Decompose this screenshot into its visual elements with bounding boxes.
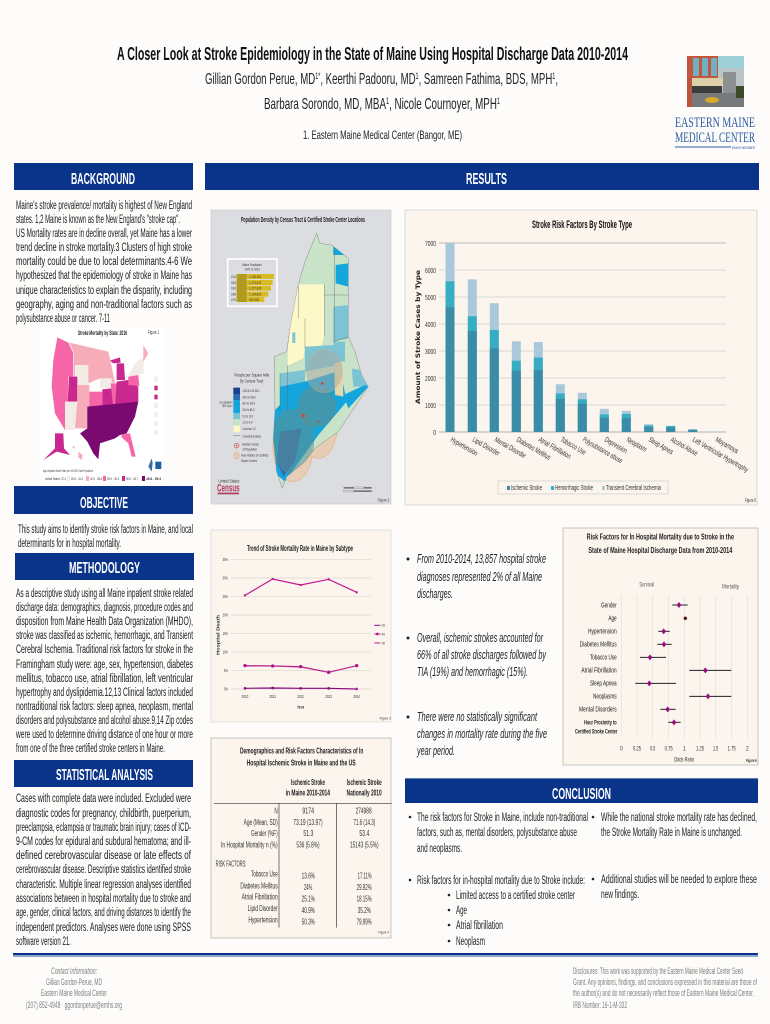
row labels: Gender (%F): [251, 829, 278, 838]
x axis labels: Tobacco Use: [559, 435, 588, 457]
legend: people per square mile: of Population: [242, 446, 257, 451]
legend: Hemorrhagic Stroke: [555, 483, 593, 492]
text block: methodology: Framingham study were: age, sex, hypertension, diabetes: [16, 659, 193, 671]
legend: people per square mile: 5.0 to 19.9: [242, 413, 253, 418]
x axis labels: 0.75: [665, 746, 673, 753]
row labels: Age (Mean, SD): [244, 818, 278, 827]
text block: background: hypothesized that the epidemiology of stroke in Maine has: [16, 270, 192, 282]
row labels: Hour Proximity to: [584, 720, 617, 726]
text block: statistical analysis: Cases with complete data were included. Excluded were: [16, 793, 191, 805]
text block: background: geography, aging and non-traditional factors such as: [16, 299, 192, 311]
heading: background: [14, 163, 193, 190]
heading: statistical analysis: STATISTICAL ANALYSIS: [56, 767, 153, 784]
text block: methodology: Cerebral Ischemia. Traditional risk factors for stroke in the: [16, 644, 193, 656]
text block: objective: This study aims to identify stroke risk factors in Maine, and local: [18, 524, 193, 536]
x axis labels: 2011: [269, 694, 276, 699]
panel: figure 6 forest plot of in-hospital mortality: Mortality: [722, 584, 739, 591]
panel: figure 1 US stroke mortality map: Figure 1: [148, 330, 159, 336]
text block: methodology: nontraditional risk factors: sleep apnea, neoplasm, mental: [16, 701, 193, 713]
text block: statistical analysis: cerebrovascular disease. Descriptive statistics identified stroke: [16, 864, 191, 876]
x axis labels: [449, 435, 750, 474]
row labels: [216, 807, 278, 925]
bullet: mortality rate change: changes in mortality rate during the five: [417, 727, 547, 741]
column headers: in Maine 2010-2014: [286, 787, 330, 797]
inset: Maine population chart: 1970 to 2010: [244, 268, 260, 272]
text block: methodology: mellitus, tobacco use, atrial fibrillation, left ventricular: [16, 673, 193, 685]
text block: statistical analysis: preeclampsia, eclampsia or traumatic brain injury; cases of ICD-: [16, 822, 191, 834]
row labels: Hypertension: [588, 627, 617, 636]
text block: background: mortality could be due to local determinants.4-6 We: [16, 256, 192, 268]
national column: 79.99%: [357, 917, 372, 926]
series markers: [243, 578, 358, 690]
legend: mortality rate classes: United States: 37.3: [45, 476, 66, 481]
inset: Maine population chart: 1,124,660: [249, 293, 261, 297]
legend: people per square mile: 20.0 to 88.3: [242, 407, 255, 412]
legend: CH: [381, 623, 385, 628]
heading: results: RESULTS: [466, 171, 507, 188]
y axis labels: [223, 557, 228, 692]
legend: people per square mile: [219, 373, 270, 463]
confidence intervals: [635, 605, 731, 722]
text block: statistical analysis: defined cerebrovascular disease or late effects of: [16, 850, 192, 862]
logo: Eastern Maine Medical Center: EMHS MEMBER: [732, 145, 755, 150]
logo: United States Census Bureau: [217, 478, 240, 495]
odds ratio markers: [647, 602, 710, 725]
inset: Maine population chart: 992,048: [249, 298, 259, 302]
inset: Maine population chart: [228, 259, 277, 306]
text block: conclusion right column: new findings.: [601, 889, 639, 901]
legend: [374, 623, 385, 645]
Maine column: 40.9%: [302, 906, 315, 915]
icon: hospital photo: [687, 56, 744, 107]
x axis labels: 2014: [353, 694, 360, 699]
authors: [205, 71, 558, 113]
text block: conclusion left column: The risk factors for Stroke in Maine, include non-traditional: [417, 812, 588, 824]
text block: disclosures: [573, 966, 757, 1010]
x axis labels: 2012: [297, 694, 304, 699]
legend: mortality rate classes: 32.5 - 35.8: [90, 476, 102, 481]
row labels: Gender: [601, 600, 617, 609]
text block: methodology: disorders and polysubstance and alcohol abuse.9,14 Zip codes: [16, 715, 193, 727]
legend: people per square mile: Less than 1.0: [242, 426, 256, 431]
text block: conclusion left column: Age: [456, 905, 467, 917]
legend: AS: [381, 631, 385, 636]
text block: methodology: discharge data: demographics, diagnosis, procedure codes and: [16, 602, 193, 614]
y axis labels: 1000: [425, 401, 436, 410]
y axis labels: 15%: [223, 631, 228, 636]
authors: , Nicole Cournoyer, MPH: [389, 96, 497, 113]
y axis labels: 5000: [425, 293, 436, 302]
bullet: mortality rate change: There were no statistically significant: [417, 710, 537, 724]
national column: 17.11%: [358, 872, 372, 881]
y axis labels: 0%: [224, 687, 228, 692]
text block: methodology: from one of the three certified stroke centers in Maine.: [16, 743, 165, 755]
inset: Maine population chart: 2010: [231, 275, 236, 279]
panel: figure 4 demographics table: Figure 4: [378, 930, 390, 935]
legend: people per square mile: 200.0 to 999.9: [242, 394, 256, 399]
panel: figure 2 population density map of Maine: Population Density by Census Tract & Certified Stroke Center Locations: [241, 217, 365, 224]
x axis labels: Lipid Disorder: [471, 435, 502, 458]
x axis labels: Atrial Fibrillation: [537, 435, 573, 461]
legend: [498, 481, 668, 494]
text block: conclusion left column: and neoplasms.: [417, 843, 462, 855]
grid lines: [231, 559, 371, 689]
authors: ,: [555, 71, 558, 88]
legend: Ischemic Stroke: [511, 483, 542, 492]
panel: figure 1 US stroke mortality map: Stroke Mortality by State: 2016: [78, 331, 127, 337]
authors: 1: [416, 71, 419, 81]
authors: 1*: [315, 71, 321, 81]
authors: 1: [386, 96, 389, 106]
inset: Maine population chart: 1990: [231, 287, 236, 291]
text block: statistical analysis: [16, 793, 192, 948]
panel: figure 6 forest plot of in-hospital mortality: Survival: [639, 581, 654, 588]
x axis labels: Polysubstance abuse: [581, 435, 624, 465]
heading: results: [205, 163, 759, 190]
logo: United States Census Bureau: United States: [218, 478, 239, 483]
text block: statistical analysis: characteristic. Multiple linear regression analyses identified: [16, 879, 191, 891]
panel: figure 6 forest plot of in-hospital mortality: [563, 528, 758, 765]
text block: conclusion left column: factors, such as, mental disorders, polysubstance abuse: [417, 827, 577, 839]
map: Maine census tracts: [273, 233, 368, 488]
panel: figure 3 mortality trend line chart: Figure 3: [380, 716, 391, 721]
map: drive-time circles over the sea: [273, 388, 338, 482]
legend: people per square mile: People per Square Mile: [234, 373, 270, 378]
row labels: Mental Disorders: [579, 705, 617, 714]
x axis labels: Neoplasm: [625, 435, 649, 454]
x axis labels: 2010: [242, 694, 249, 699]
bullet: stroke subtype share: TIA (19%) and hemorrhagic (15%).: [417, 665, 528, 679]
panel: figure 6 forest plot of in-hospital mortality: Odds Ratio: [674, 757, 694, 764]
Maine column: 536 (5.8%): [296, 841, 320, 850]
text block: statistical analysis: independent predictors. Analyses were done using SPSS: [16, 922, 191, 934]
y axis labels: 3000: [425, 347, 436, 356]
legend: people per square mile: 1.0 to 4.9: [242, 420, 253, 425]
heading: background: BACKGROUND: [71, 171, 135, 188]
legend: mortality rate classes: 45.8 - 55.4: [146, 476, 162, 481]
x axis labels: [242, 694, 360, 709]
y axis labels: 0: [433, 428, 436, 437]
text block: conclusion left column: Atrial fibrillation: [456, 920, 503, 932]
legend: people per square mile: 1,000.0 to 21,353.1: [242, 388, 260, 393]
y axis labels: 10%: [223, 650, 228, 655]
panel: figure 3 mortality trend line chart: [211, 530, 391, 722]
row labels: Sleep Apnea: [590, 679, 617, 688]
bullet: hospital stroke diagnoses: [406, 552, 546, 601]
inset: Maine population chart: 1980: [231, 293, 236, 297]
y axis labels: 5%: [224, 668, 228, 673]
logo: United States Census Bureau: Census: [217, 483, 240, 495]
table title: Demographics and Risk Factors Characteristics of In: [240, 745, 363, 755]
heading: conclusion: CONCLUSION: [552, 786, 611, 803]
inset: Maine population chart: 2000: [231, 281, 236, 285]
legend: people per square mile: Hour Radius of Certified: [241, 452, 268, 457]
text block: conclusion right column: [592, 812, 757, 901]
x axis labels: 1.5: [713, 746, 718, 753]
legend: TIA: [381, 640, 385, 645]
x axis labels: Diabetes Mellitus: [515, 435, 553, 462]
row labels: N: [274, 807, 278, 816]
x axis labels: 0: [620, 746, 623, 753]
legend: people per square mile: County Boundary: [242, 433, 261, 438]
authors: Barbara Sorondo, MD, MBA: [264, 96, 463, 113]
heading: conclusion: [405, 779, 758, 803]
y axis labels: 25%: [223, 594, 228, 599]
authors: 1: [552, 71, 555, 81]
x axis labels: 0.25: [633, 746, 641, 753]
legend: people per square mile: By Census Tract: [240, 378, 264, 383]
column headers: [286, 777, 382, 797]
x axis labels: [620, 746, 749, 753]
affiliation: 1. Eastern Maine Medical Center (Bangor, ME): [303, 128, 462, 142]
legend: mortality rate classes: 35.9 - 39.4: [107, 476, 119, 481]
row labels: Neoplasms: [593, 692, 617, 701]
national column: 274988: [356, 807, 372, 816]
heading: methodology: [15, 553, 194, 580]
x axis labels: Alcohol Abuse: [669, 435, 699, 458]
authors: , Keerthi Padooru, MD: [320, 71, 416, 88]
text block: background: [16, 200, 192, 325]
legend: mortality rate classes: [45, 476, 162, 481]
x axis labels: Sleep Apnea: [647, 435, 675, 456]
column headers: Ischemic Stroke: [291, 777, 325, 787]
text block: objective: determinants for in hospital mortality.: [18, 538, 121, 550]
row labels: Lipid Disorder: [248, 904, 278, 913]
Maine column: 50.3%: [302, 917, 315, 926]
y axis labels: 30%: [223, 576, 228, 581]
legend: people per square mile: Stroke Centers: [241, 458, 257, 463]
inset: Maine population chart: 1,227,928: [249, 287, 261, 291]
row labels: [575, 600, 618, 736]
text block: background: states. 1,2 Maine is known as the New England's "stroke cap".: [16, 214, 180, 226]
inset: Maine population chart: Maine Population: [242, 263, 262, 267]
text block: contact information: (207) 852-4948 ggordonperue@emhs.org: [26, 1000, 122, 1010]
y axis labels: 6000: [425, 266, 436, 275]
x axis labels: 1.25: [696, 746, 704, 753]
panel: figure 5 stroke risk factors bar chart: [405, 210, 757, 505]
panel: figure 3 mortality trend line chart: Hospital Death: [216, 615, 221, 655]
legend: mortality rate classes: 25.5 - 31.3: [71, 476, 83, 481]
stacked bars: [446, 243, 720, 432]
row labels: Tobacco Use: [251, 870, 278, 879]
panel: figure 2 population density map of Maine: Figure 2: [378, 498, 390, 503]
map of US states: [43, 337, 161, 472]
text block: methodology: were used to determine driving distance of one hour or more: [15, 729, 193, 741]
row labels: Age: [608, 614, 617, 623]
heading: objective: [14, 486, 193, 514]
text block: disclosures: IRB Number: 16-1-M-332: [573, 1000, 627, 1010]
x axis labels: Mental Disorder: [493, 435, 528, 460]
row labels: Atrial Fibrillation: [242, 893, 278, 902]
bullet: stroke subtype share: Overall, ischemic strokes accounted for: [417, 631, 543, 645]
panel: figure 2 population density map of Maine: [211, 210, 391, 504]
text block: contact information: Contact Information:: [51, 966, 97, 976]
text block: statistical analysis: software version 21.: [16, 936, 71, 948]
text block: background: polysubstance abuse or cancer. 7-11: [16, 313, 110, 325]
text block: conclusion left column: [409, 812, 588, 948]
panel: figure 5 stroke risk factors bar chart: Stroke Risk Factors By Stroke Type: [532, 219, 632, 231]
row labels: In Hospital Mortality n (%): [221, 841, 278, 850]
national column: 18.15%: [357, 895, 372, 904]
panel: figure 6 forest plot of in-hospital mortality: Figure 6: [746, 758, 757, 763]
row labels: Diabetes Mellitus: [580, 640, 617, 649]
x axis labels: 2: [746, 746, 749, 753]
legend: people per square mile: 88.4 to 199.9: [242, 401, 255, 406]
text block: background: trend decline in stroke mortality.3 Clusters of high stroke: [16, 242, 192, 254]
Maine column: 25.1%: [302, 895, 315, 904]
grid lines: [621, 595, 747, 738]
heading: objective: OBJECTIVE: [80, 495, 128, 512]
x axis labels: Hypertension: [449, 435, 479, 458]
x axis labels: 1.75: [728, 746, 736, 753]
y axis labels: [425, 239, 436, 437]
text block: contact information: Gillian Gordon-Perue, MD: [46, 977, 102, 987]
heading: statistical analysis: [14, 760, 193, 787]
bullet: mortality rate change: [406, 710, 547, 758]
bullet: stroke subtype share: [406, 631, 546, 679]
text block: conclusion left column: Limited access to a certified stroke center: [456, 890, 575, 902]
text block: contact information: [26, 966, 122, 1010]
table title: Hospital Ischemic Stroke in Maine and the US: [247, 757, 356, 767]
table title: [240, 745, 363, 767]
panel: figure 4 demographics table: [211, 738, 392, 938]
row labels: Tobacco Use: [590, 653, 617, 662]
x axis labels: Moyamoya: [714, 435, 741, 456]
text block: objective: [18, 524, 193, 550]
logo: Eastern Maine Medical Center: [675, 56, 755, 150]
national column: 35.2%: [358, 906, 371, 915]
text block: methodology: [15, 588, 193, 755]
panel: figure 3 mortality trend line chart: Trend of Stroke Mortality Rate in Maine by Subtype: [247, 544, 353, 553]
Maine column: 9174: [302, 807, 314, 816]
grid lines: [439, 243, 726, 432]
text block: conclusion left column: Risk factors for in-hospital mortality due to Stroke include:: [417, 875, 585, 887]
Maine column: 73.19 (13.97): [293, 818, 323, 827]
row labels: RISK FACTORS:: [216, 859, 246, 868]
series lines: [245, 579, 357, 689]
text block: methodology: hypertrophy and dyslipidemia.12,13 Clinical factors included: [16, 687, 193, 699]
text block: conclusion left column: Neoplasm: [456, 936, 485, 948]
Maine column: 24%: [304, 883, 312, 892]
Maine column: 13.6%: [302, 872, 315, 881]
text block: statistical analysis: age, gender, clinical factors, and driving distances to identify the: [16, 907, 191, 919]
column headers: Ischemic Stroke: [347, 777, 382, 787]
row labels: Hypertension: [248, 916, 278, 925]
legend: Transient Cerebral Ischemia: [606, 483, 661, 492]
text block: results bullets: [406, 552, 547, 758]
bullet: mortality rate change: year period.: [416, 744, 455, 758]
row labels: Certified Stroke Center: [575, 730, 618, 736]
heading: methodology: METHODOLOGY: [69, 560, 140, 577]
national column: 53.4: [359, 829, 370, 838]
national column: [350, 807, 379, 926]
x axis labels: 1: [683, 746, 686, 753]
bullet: hospital stroke diagnoses: From 2010-2014, 13,857 hospital stroke: [417, 552, 546, 566]
text block: background: unique characteristics to explain the disparity, including: [16, 285, 192, 297]
plot title: [587, 532, 734, 555]
authors: , Samreen Fathima, BDS, MPH: [419, 71, 552, 88]
y axis labels: 4000: [425, 320, 436, 329]
panel: figure 1 US stroke mortality map: [40, 328, 163, 484]
y axis title: Amount of Stroke Cases by Type: [414, 269, 422, 404]
panel: figure 5 stroke risk factors bar chart: Figure 5: [745, 498, 756, 504]
inset: Maine population chart: 1,274,923: [249, 281, 261, 285]
legend: people per square mile: U.S. population: [219, 400, 232, 404]
row labels: Atrial Fibrillation: [581, 666, 617, 675]
text block: statistical analysis: 9-CM codes for epidural and subdural hematoma; and ill-: [16, 836, 191, 848]
text block: methodology: disposition from Maine Health Data Organization (MHDO),: [16, 616, 193, 628]
x axis labels: 0.5: [650, 746, 655, 753]
text block: background: US Mortality rates are in decline overall, yet Maine has a lower: [16, 228, 192, 240]
Maine column: 51.3: [303, 829, 314, 838]
bullet: hospital stroke diagnoses: diagnoses represented 2% of all Maine: [417, 570, 542, 584]
y axis labels: 7000: [425, 239, 436, 248]
authors: Gillian Gordon Perue, MD: [205, 71, 388, 88]
inset: Maine population chart: 1,328,361: [249, 275, 261, 279]
legend: people per square mile: Median Center: [242, 442, 259, 447]
text block: statistical analysis: associations between in hospital mortality due to stroke and: [16, 893, 191, 905]
inset: Maine population chart: 1970: [231, 298, 236, 302]
Maine column: [293, 807, 323, 926]
text block: background: Maine's stroke prevalence/ mortality is highest of New England: [16, 200, 192, 212]
bullet: stroke subtype share: 66% of all stroke discharges followed by: [417, 648, 546, 662]
bullet: hospital stroke diagnoses: discharges.: [417, 587, 453, 601]
national column: 71.6 (14.3): [353, 818, 376, 827]
y axis labels: 2000: [425, 374, 436, 383]
national column: 15143 (5.5%): [350, 841, 379, 850]
authors: 1: [497, 96, 500, 106]
x axis labels: 2013: [325, 694, 332, 699]
y axis labels: 20%: [223, 613, 228, 618]
x axis labels: Years: [297, 704, 305, 709]
text block: methodology: stroke was classified as ischemic, hemorrhagic, and Transient: [16, 630, 193, 642]
national column: 29.92%: [357, 883, 372, 892]
scale bar: [344, 487, 372, 492]
x axis labels: Depression: [603, 435, 629, 455]
column headers: Nationally 2010: [347, 787, 382, 797]
row labels: Diabetes Mellitus: [240, 881, 278, 890]
legend: mortality rate classes: 39.5 - 45.7: [126, 476, 138, 481]
text block: contact information: Eastern Maine Medical Center: [41, 988, 107, 998]
text block: statistical analysis: diagnostic codes for pregnancy, childbirth, puerperium,: [16, 808, 191, 820]
y axis labels: 35%: [223, 557, 228, 562]
text block: methodology: As a descriptive study using all Maine inpatient stroke related: [16, 588, 193, 600]
legend: people per square mile: 88.4 /sq mi: [222, 404, 232, 408]
panel: figure 1 US stroke mortality map: Age-Adjusted Death Rate per 100,000 Total Population: [43, 468, 93, 473]
